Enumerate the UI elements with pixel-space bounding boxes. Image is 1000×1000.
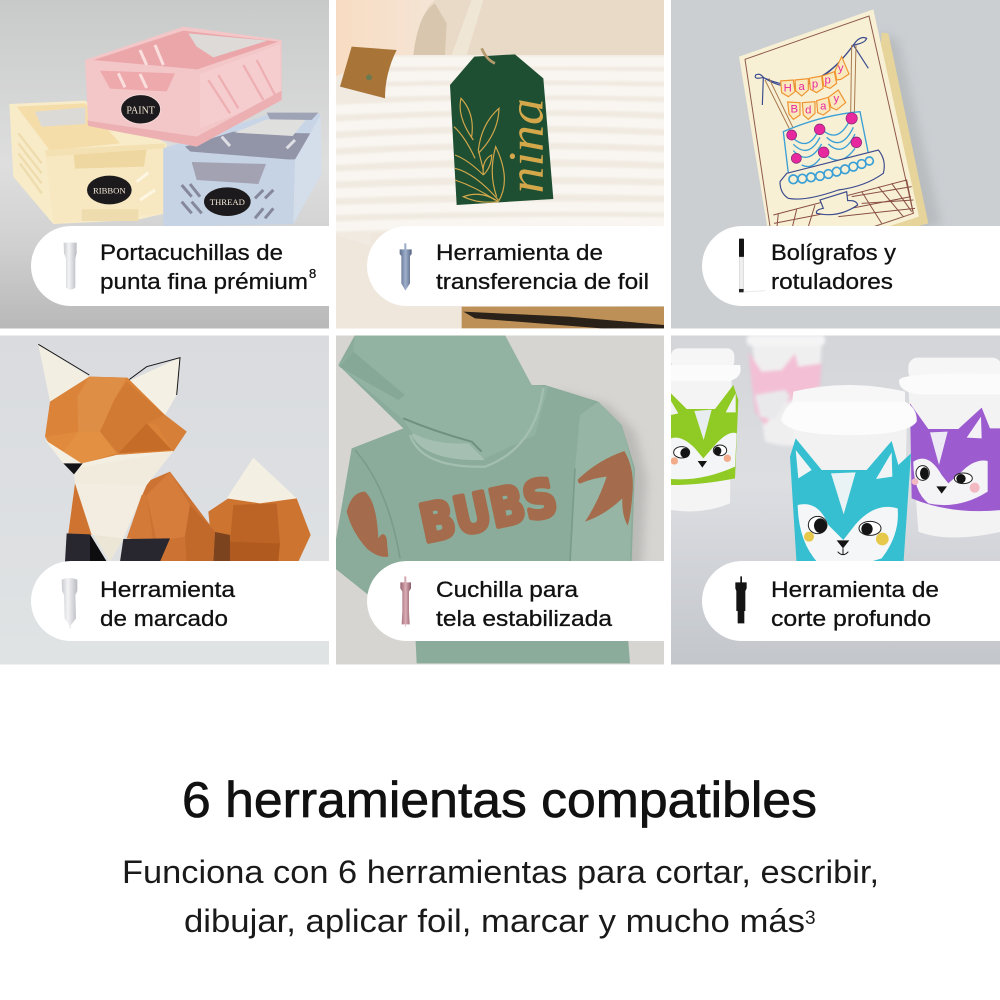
label: paint: PAINT (126, 105, 155, 116)
caption pill (367, 561, 664, 641)
card front: a (799, 81, 806, 93)
icon: fine-point blade housing (64, 243, 77, 290)
caption text: Bolígrafos y (771, 240, 896, 265)
label: thread: THREAD (210, 197, 245, 207)
label: ribbon (87, 176, 132, 204)
body text: 3 (805, 908, 816, 929)
photo: rope basket with foil tag (335, 0, 665, 330)
caption text: Cuchilla para (436, 577, 579, 602)
caption text: tela estabilizada (436, 606, 613, 631)
caption pill (367, 226, 664, 306)
card front: p (825, 74, 831, 86)
body text (122, 854, 879, 939)
panel: herramienta de corte profundo (665, 335, 1000, 665)
photo: cups with fox sleeves (665, 335, 1000, 665)
card front: d (805, 104, 811, 116)
label: paint (121, 95, 161, 124)
caption text: rotuladores (771, 269, 893, 294)
caption text: 8 (309, 266, 316, 281)
card front: H (784, 82, 792, 94)
cup: green (671, 348, 741, 511)
caption pill (702, 226, 1000, 306)
caption text: Herramienta (100, 577, 236, 602)
cup: purple (899, 358, 1000, 537)
tag lettering: nina (497, 98, 553, 193)
panel: portacuchillas de punta fina prémium (0, 0, 329, 328)
card front: y (838, 63, 844, 75)
cup: blue (781, 385, 917, 565)
panel: cuchilla para tela estabilizada (336, 336, 664, 664)
caption text: de marcado (100, 606, 228, 631)
caption text: corte profundo (771, 606, 931, 631)
panel: herramienta de transferencia de foil (336, 0, 664, 328)
photo: paper fox (0, 335, 330, 665)
icon: scoring tool (62, 578, 77, 628)
photo: green hoodie (335, 335, 665, 665)
icon: marker pen (739, 239, 765, 292)
panel: bolígrafos y rotuladores (665, 0, 1000, 330)
BUBS lettering: BUBS (415, 468, 562, 555)
photo: birthday card (665, 0, 1000, 330)
sleeve patch: left (347, 492, 388, 557)
sleeve patch: arrow (578, 451, 633, 526)
card front: a (820, 100, 827, 112)
caption text (436, 580, 612, 626)
photo: stacked crates (0, 0, 330, 330)
caption pill (31, 226, 329, 306)
caption text (436, 244, 648, 290)
caption text (771, 577, 939, 631)
gift tag (450, 48, 553, 205)
panel: herramienta de marcado (0, 336, 329, 664)
body text: Funciona con 6 herramientas para cortar, escribir, (122, 854, 879, 890)
card front (739, 10, 919, 226)
caption text (100, 580, 236, 626)
icon: foil transfer tool (400, 243, 412, 291)
icon: deep-point blade (735, 576, 747, 623)
fox body (38, 344, 311, 562)
caption pill (31, 561, 329, 641)
caption text: Herramienta de (436, 240, 603, 265)
label: ribbon: RIBBON (93, 185, 126, 195)
caption text (772, 243, 896, 290)
title: 6 herramientas compatibles (182, 772, 817, 828)
caption text: punta fina prémium (100, 269, 308, 294)
body text: dibujar, aplicar foil, marcar y mucho más (184, 903, 805, 939)
card front: p (812, 78, 818, 90)
card front: B (791, 104, 798, 116)
cup: pink (747, 335, 825, 446)
card front: y (833, 93, 839, 105)
caption pill (702, 561, 1000, 641)
caption text (100, 240, 316, 294)
label: thread (204, 187, 251, 216)
icon: bonded fabric blade (400, 576, 411, 627)
caption text: transferencia de foil (436, 269, 649, 294)
caption text: Herramienta de (771, 577, 939, 602)
caption text: Portacuchillas de (100, 240, 283, 265)
